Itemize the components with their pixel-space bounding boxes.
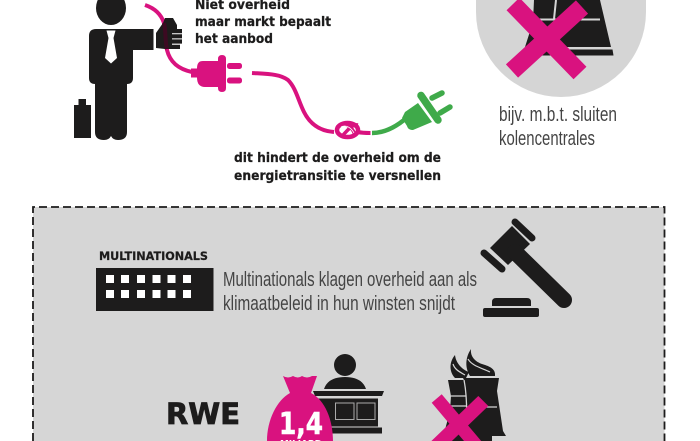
- green cable and plug: [372, 93, 450, 133]
- icon: judge at bench: [313, 354, 384, 434]
- text: hinders energy transition: [234, 150, 441, 184]
- icon: hand holding cable: [156, 18, 182, 49]
- text: hinders energy transition: energietransitie te versnellen: [234, 168, 441, 184]
- heading: market determines supply: maar markt bepaalt: [195, 14, 331, 30]
- icon: money bag with amount: [267, 376, 333, 441]
- text: closing coal plants: bijv. m.b.t. sluiten: [499, 104, 617, 126]
- text: hinders energy transition: dit hindert de overheid om de: [234, 150, 441, 166]
- icon: office building: [96, 268, 214, 311]
- text: closing coal plants: [499, 104, 617, 150]
- icon: money bag with amount: 1,4: [279, 407, 323, 441]
- text: closing coal plants: kolencentrales: [499, 128, 595, 150]
- icon: businessman with suitcase: [74, 0, 154, 140]
- icon: coal plant crossed out in circle: [476, 0, 646, 97]
- heading: market determines supply: het aanbod: [195, 31, 273, 47]
- knotted cable: [252, 73, 370, 137]
- panel: multinationals: [33, 207, 664, 441]
- logo: RWE: RWE: [166, 397, 240, 431]
- icon: gavel: [483, 222, 564, 317]
- label: multinationals: MULTINATIONALS: [99, 249, 208, 263]
- text: multinationals sue government: [223, 269, 477, 315]
- text: multinationals sue government: Multinationals klagen overheid aan als: [223, 269, 477, 291]
- heading: market determines supply: [195, 0, 331, 47]
- icon: coal plants crossed out: [431, 349, 506, 441]
- pink cable and plug: [145, 5, 242, 92]
- text: multinationals sue government: klimaatbeleid in hun winsten snijdt: [223, 293, 455, 315]
